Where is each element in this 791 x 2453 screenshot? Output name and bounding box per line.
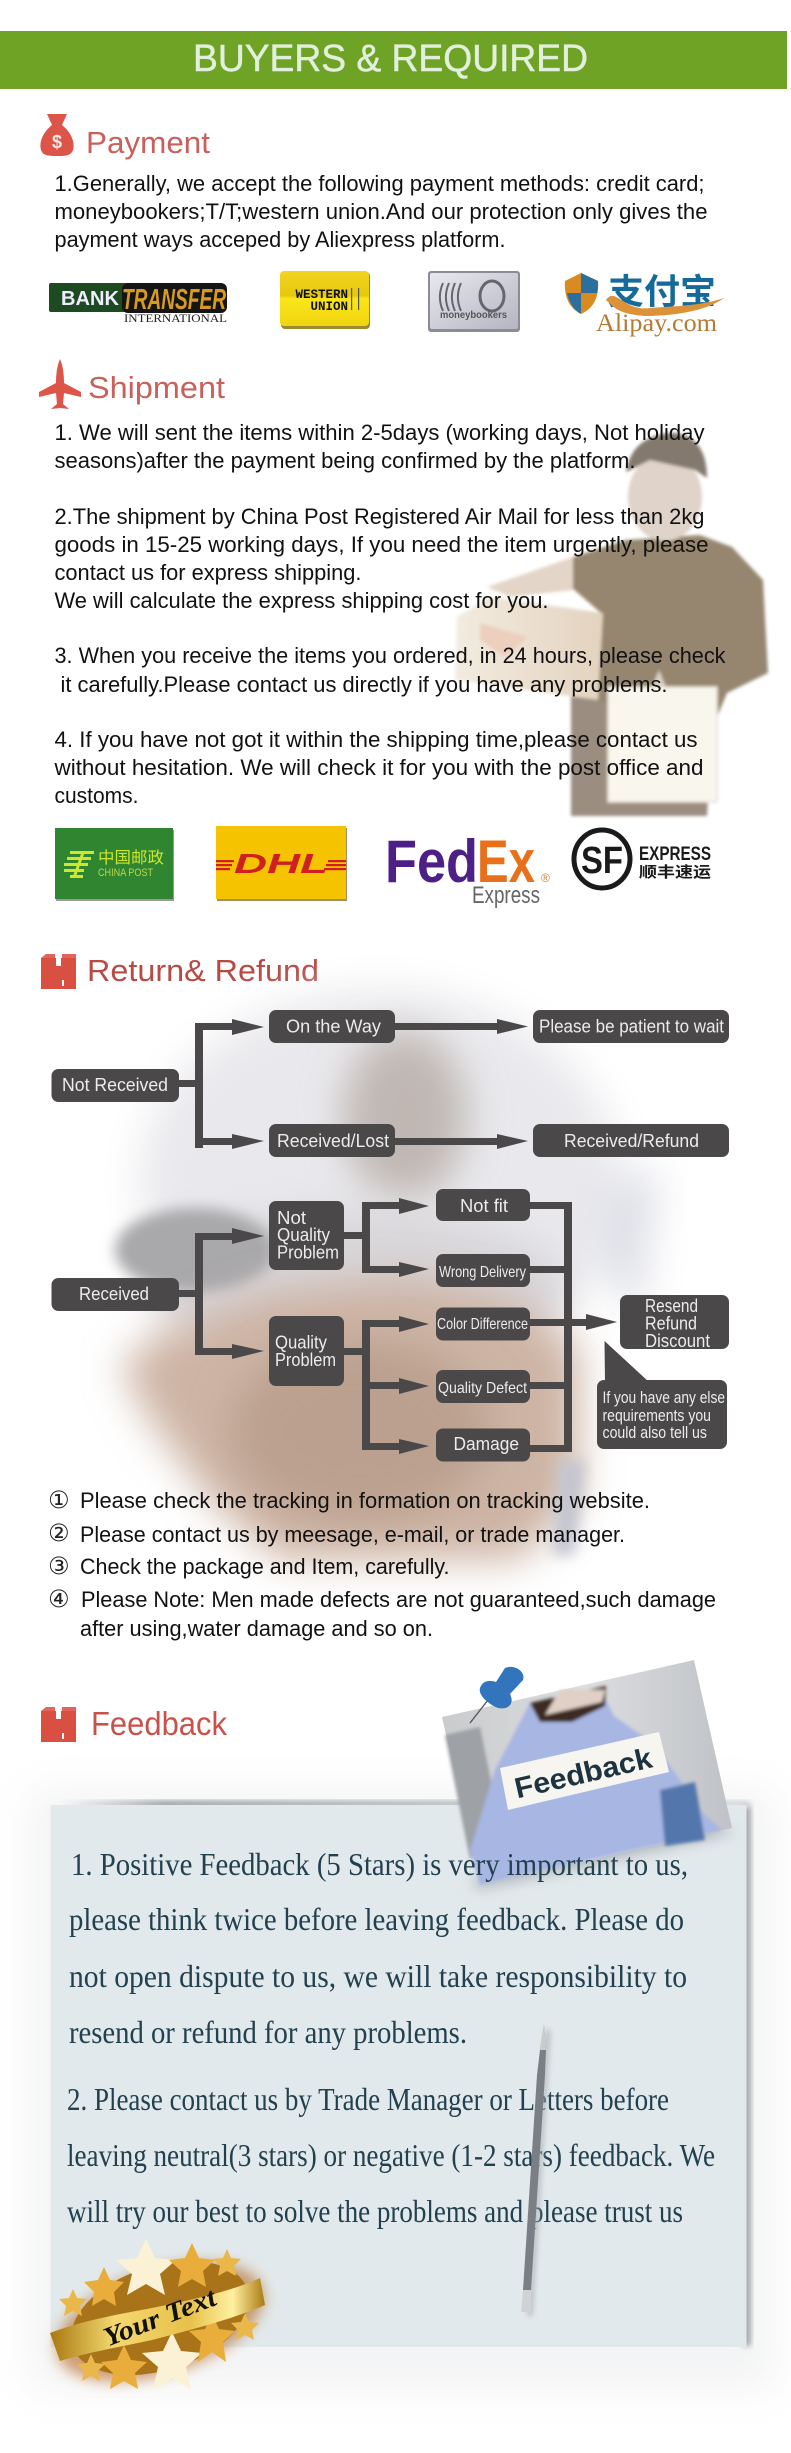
logo: china post — [55, 828, 174, 901]
node: quality problem: Problem — [275, 1349, 336, 1370]
ribbon text: Your Text — [99, 2281, 222, 2352]
numbered notes: ② — [48, 1519, 70, 1547]
node: resend refund discount: Resend — [645, 1295, 698, 1316]
logo: DHL — [216, 826, 347, 901]
badge: gold stars with ribbon — [41, 2239, 279, 2405]
feedback text: please think twice before leaving feedback. Please do — [69, 1901, 684, 1937]
shipment text block: without hesitation. We will check it for you with the post office and — [53, 755, 703, 780]
node: not quality problem: Problem — [277, 1242, 339, 1262]
logo: fedex express: Express — [472, 882, 540, 909]
logo: western union: UNION — [310, 300, 348, 314]
callout: other requirements: could also tell us — [602, 1424, 707, 1442]
logo: fedex express — [385, 828, 550, 909]
icon: money bag — [40, 114, 74, 156]
logo: moneybookers — [428, 271, 520, 332]
node: resend refund discount: Refund — [645, 1312, 697, 1334]
shipment text block: it carefully.Please contact us directly if you have any problems. — [60, 672, 668, 697]
node: quality problem: Quality — [275, 1332, 328, 1352]
neck and face — [628, 453, 702, 541]
node: wrong delivery: Wrong Delivery — [439, 1264, 526, 1281]
parcel — [455, 597, 603, 700]
shipment text block: 4. If you have not got it within the shipping time,please contact us — [54, 727, 698, 752]
blurred handshake background — [115, 990, 660, 1560]
clipboard clip — [652, 670, 666, 687]
node: received/refund: Received/Refund — [564, 1130, 699, 1151]
node: wrong delivery — [436, 1254, 530, 1287]
shipment text block: 2.The shipment by China Post Registered Air Mail for less than 2kg — [54, 504, 704, 529]
feedback photo — [442, 1660, 736, 1889]
logo: alipay: 支付宝 — [608, 273, 716, 312]
logo: DHL: DHL — [234, 848, 328, 879]
pencil — [521, 2025, 550, 2316]
icon: blue push pin — [470, 1667, 524, 1723]
node: please be patient: Please be patient to wait — [539, 1016, 724, 1036]
payment text block: payment ways acceped by Aliexpress platform. — [54, 227, 506, 252]
logo: western union: WESTERN — [295, 288, 348, 302]
payment text block — [54, 171, 708, 252]
sign text: Feedback — [512, 1742, 656, 1805]
logo: western union — [280, 271, 370, 329]
heading: return and refund: Return& Refund — [87, 953, 319, 988]
parcel label — [480, 623, 528, 657]
logo: fedex express: Fed — [385, 828, 478, 895]
icon: money bag: $ — [52, 132, 62, 152]
logo: alipay: Alipay.com — [596, 310, 718, 337]
numbered notes — [48, 1486, 716, 1641]
numbered notes: ① — [48, 1486, 70, 1514]
node: not received: Not Received — [62, 1074, 168, 1095]
shipment text block — [53, 420, 726, 808]
heading: shipment: Shipment — [88, 370, 225, 405]
logo: fedex express: ® — [541, 871, 550, 885]
feedback panel — [30, 1790, 775, 2390]
feedback text: 1. Positive Feedback (5 Stars) is very important to us, — [71, 1846, 688, 1882]
callout: other requirements: If you have any else — [602, 1389, 725, 1407]
numbered notes: Please check the tracking in formation on tracking website. — [80, 1488, 650, 1513]
node: received — [52, 1278, 179, 1311]
flow chart — [52, 1010, 729, 1462]
node: received/lost: Received/Lost — [277, 1130, 389, 1151]
shipment text block: We will calculate the express shipping cost for you. — [54, 588, 548, 613]
node: please be patient — [533, 1010, 729, 1043]
icon: feedback box — [41, 1707, 76, 1742]
node: on the way — [269, 1010, 395, 1043]
node: received/refund — [533, 1124, 729, 1157]
node: quality problem — [269, 1316, 344, 1386]
node: resend refund discount — [620, 1295, 729, 1351]
node: not fit — [436, 1189, 530, 1221]
logo: bank transfer — [49, 283, 227, 325]
node: received: Received — [79, 1283, 149, 1304]
shipment text block: contact us for express shipping. — [54, 560, 362, 585]
clipboard — [608, 687, 717, 802]
node: received/lost — [269, 1124, 395, 1157]
numbered notes: Please contact us by meesage, e-mail, or trade manager. — [80, 1522, 625, 1547]
numbered notes: ④ — [48, 1585, 70, 1613]
header banner — [0, 31, 787, 89]
header title: BUYERS & REQUIRED — [193, 38, 588, 80]
numbered notes: ③ — [48, 1552, 70, 1580]
numbered notes: Please Note: Men made defects are not guaranteed,such damage — [81, 1587, 716, 1612]
icon: airplane — [39, 359, 81, 409]
feedback text: 2. Please contact us by Trade Manager or Letters before — [67, 2081, 669, 2117]
logo: SF express: 顺丰速运 — [639, 863, 711, 881]
numbered notes: Check the package and Item, carefully. — [80, 1554, 450, 1579]
shipment text block: 1. We will sent the items within 2-5days (working days, Not holiday — [54, 420, 704, 445]
logo: SF express: EXPRESS — [639, 844, 711, 865]
logo: SF express: SF — [581, 840, 623, 882]
shipment text block: 3. When you receive the items you ordered, in 24 hours, please check — [54, 643, 726, 668]
shipment text block: goods in 15-25 working days, If you need the item urgently, please — [54, 532, 709, 557]
arm — [487, 557, 573, 597]
logo: bank transfer: TRANSFER — [122, 284, 226, 316]
logo: moneybookers: moneybookers — [440, 310, 507, 321]
payment text block: moneybookers;T/T;western union.And our protection only gives the — [54, 199, 708, 224]
payment text block: 1.Generally, we accept the following payment methods: credit card; — [54, 171, 704, 196]
node: color difference: Color Difference — [437, 1316, 528, 1333]
logo: bank transfer: BANK — [61, 288, 120, 310]
numbered notes: after using,water damage and so on. — [80, 1616, 433, 1641]
node: not quality problem — [269, 1201, 344, 1270]
node: quality defect — [436, 1370, 530, 1403]
feedback text: will try our best to solve the problems and please trust us — [67, 2193, 683, 2229]
heading: payment: Payment — [86, 125, 210, 160]
shipment text block: customs. — [54, 783, 138, 808]
logo: bank transfer: INTERNATIONAL — [124, 311, 227, 325]
stars — [59, 2239, 259, 2390]
shirt — [571, 535, 768, 720]
sign — [500, 1732, 669, 1810]
node: not quality problem: Not — [277, 1207, 306, 1228]
node: on the way: On the Way — [286, 1016, 382, 1036]
delivery man photo — [455, 433, 768, 816]
trousers — [571, 690, 715, 816]
node: not quality problem: Quality — [277, 1224, 331, 1245]
callout: other requirements — [597, 1380, 727, 1449]
logo: china post: CHINA POST — [98, 867, 153, 879]
logo: china post: 中国邮政 — [98, 849, 164, 867]
icon: parcel box — [41, 954, 76, 989]
logo: SF express — [574, 830, 711, 888]
node: damage — [436, 1428, 530, 1462]
feedback text: resend or refund for any problems. — [69, 2014, 467, 2050]
cap — [626, 433, 707, 478]
node: not received — [52, 1069, 179, 1102]
shipment text block: seasons)after the payment being confirmed by the platform. — [54, 448, 636, 473]
logo: alipay — [565, 273, 724, 337]
node: color difference — [436, 1308, 530, 1340]
logo: fedex express: Ex — [477, 828, 535, 895]
ribbon — [50, 2278, 265, 2361]
callout: other requirements: requirements you — [602, 1407, 711, 1425]
flow connectors — [179, 1019, 649, 1454]
node: resend refund discount: Discount — [645, 1330, 710, 1351]
feedback text — [67, 1846, 715, 2229]
heading: feedback: Feedback — [91, 1705, 227, 1742]
feedback text: not open dispute to us, we will take responsibility to — [69, 1958, 687, 1994]
node: quality defect: Quality Defect — [438, 1380, 527, 1397]
node: not fit: Not fit — [460, 1195, 508, 1216]
node: damage: Damage — [454, 1433, 519, 1454]
